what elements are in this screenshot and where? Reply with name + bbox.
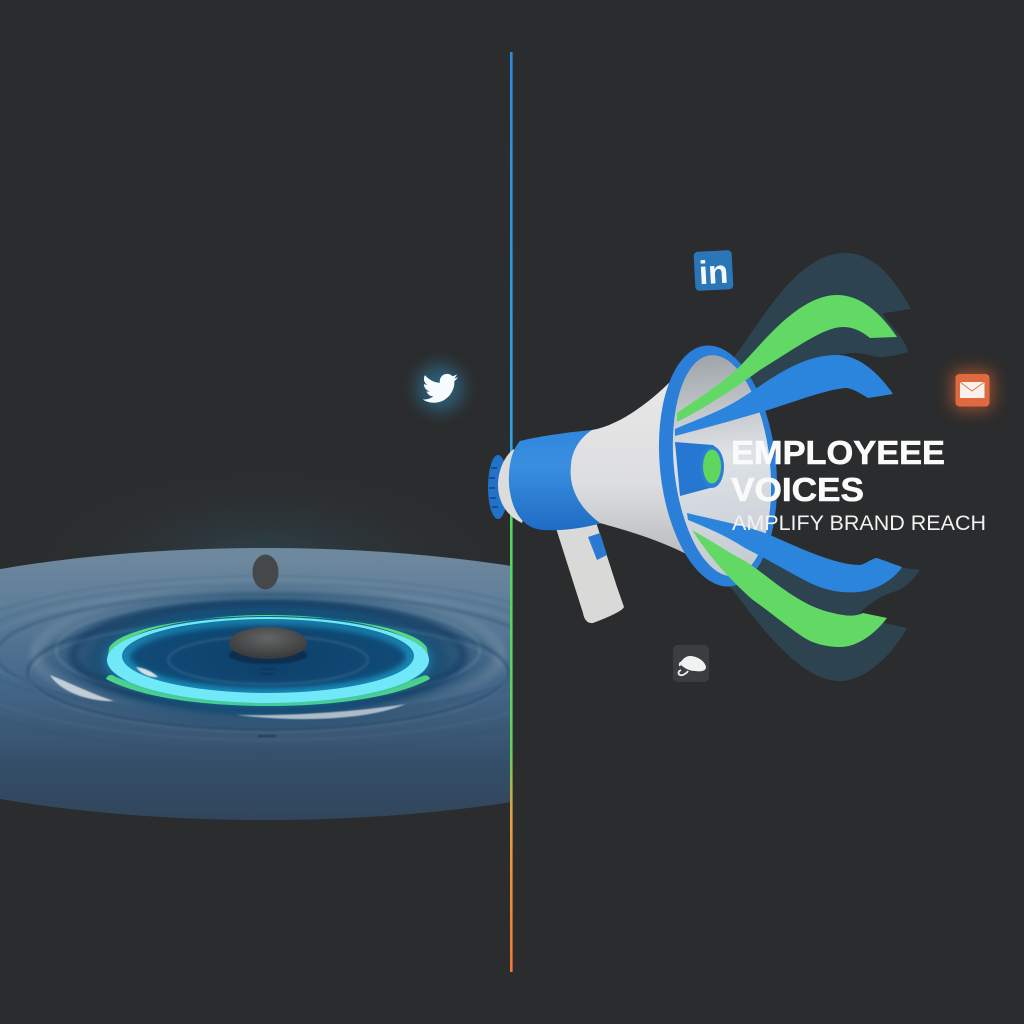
trigger button bbox=[588, 533, 607, 560]
dark upper wave bbox=[728, 253, 911, 405]
green lower wave bbox=[692, 530, 887, 647]
knob ridges bbox=[489, 468, 498, 507]
falling stone bbox=[252, 554, 278, 590]
water surface with ripples bbox=[0, 548, 510, 820]
blue upper wave bbox=[675, 355, 893, 436]
icon: linkedin: in bbox=[698, 253, 729, 291]
driver cap rim bbox=[700, 446, 724, 488]
driver cylinder bbox=[675, 442, 721, 496]
inner ripple rings bbox=[28, 598, 508, 732]
icon: bottom app tile bbox=[673, 645, 709, 682]
rear knob bbox=[488, 455, 508, 519]
horn ring bbox=[648, 340, 788, 592]
driver cap bbox=[703, 450, 721, 484]
blue grip bbox=[509, 430, 610, 530]
icon: email bbox=[952, 370, 993, 410]
subtitle: AMPLIFY BRAND REACH bbox=[732, 511, 986, 535]
vertical divider line bbox=[510, 52, 513, 972]
heading line two: VOICES bbox=[731, 471, 864, 508]
icon: twitter bird bbox=[416, 364, 464, 412]
blue lower wave bbox=[687, 513, 902, 592]
green upper wave bbox=[677, 295, 897, 422]
teal inner glow bbox=[126, 621, 410, 693]
heading line one: EMPLOYEEE bbox=[731, 434, 945, 471]
title block bbox=[731, 434, 986, 535]
handle bbox=[555, 522, 624, 623]
dark lower wave bbox=[725, 555, 920, 681]
deep pool bbox=[46, 586, 490, 726]
resting stone bbox=[229, 627, 307, 659]
sound waves: dark back layers bbox=[725, 253, 920, 681]
green ring arcs bbox=[106, 615, 430, 706]
water disc bbox=[0, 548, 510, 820]
sound waves: bright layers bbox=[675, 295, 902, 647]
cyan glowing ring bbox=[107, 617, 429, 703]
stone reflection bbox=[229, 646, 307, 737]
background glow above water bbox=[0, 450, 535, 670]
cone body bbox=[571, 380, 690, 556]
outer ripple rings bbox=[0, 584, 510, 698]
broad light swell bbox=[36, 597, 500, 713]
cyan ring glow bbox=[107, 617, 429, 703]
water highlights bbox=[50, 667, 406, 719]
megaphone bbox=[488, 340, 788, 623]
rear white band bbox=[498, 449, 530, 523]
inner cone bbox=[659, 348, 785, 584]
